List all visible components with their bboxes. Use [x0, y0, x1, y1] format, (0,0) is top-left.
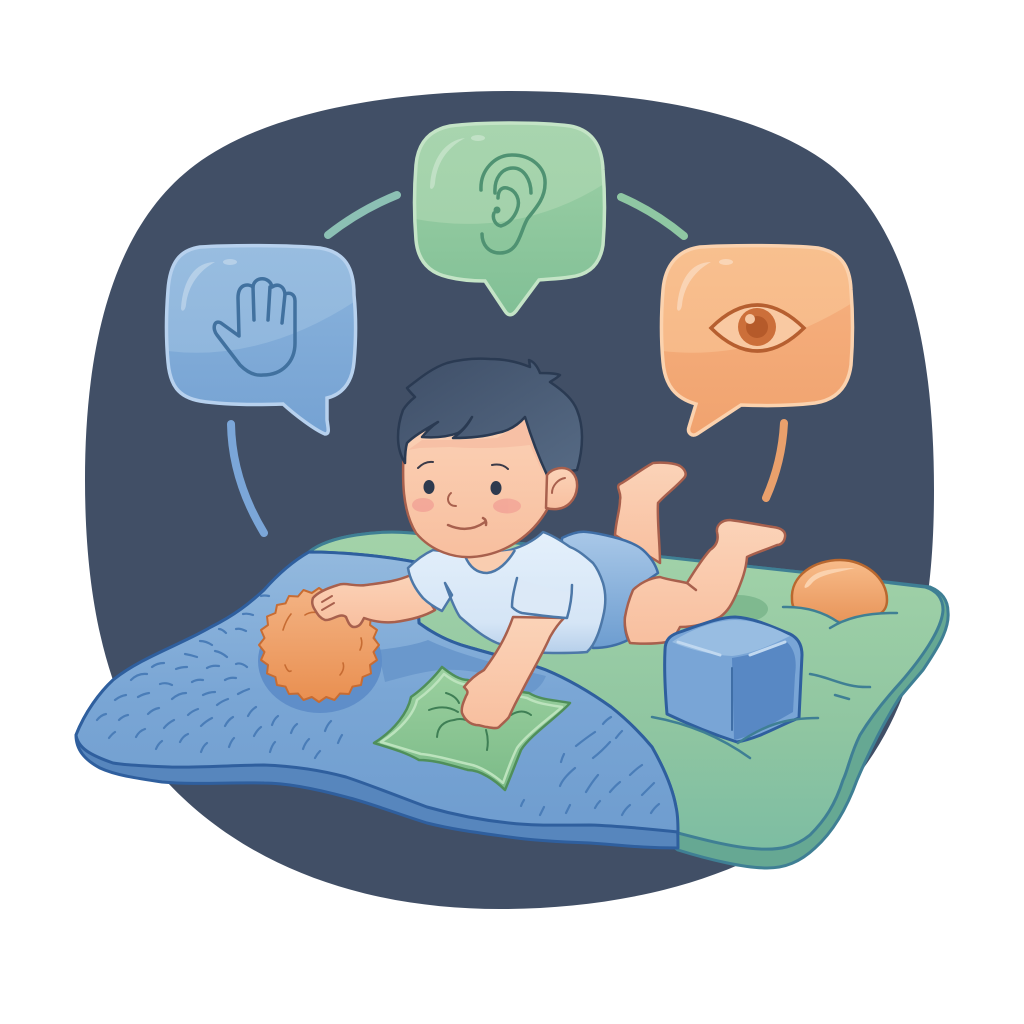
hair	[398, 359, 582, 475]
stitch marks	[97, 596, 659, 815]
dark background blob	[85, 91, 934, 909]
connector arcs	[231, 195, 784, 533]
shadow under baby on blanket	[378, 640, 546, 695]
icon: hand	[214, 279, 295, 375]
icon: eye	[711, 305, 804, 351]
cheeks	[412, 498, 521, 514]
ear	[546, 468, 577, 509]
speech bubble: hearing	[410, 123, 610, 320]
near leg and foot	[625, 520, 785, 644]
wrinkles around cube	[652, 717, 818, 758]
hair shadow on forehead	[408, 420, 545, 478]
far arm and hand on ball	[312, 575, 435, 627]
diaper	[560, 532, 658, 648]
shadow patches on green	[708, 595, 768, 623]
nose	[448, 493, 456, 506]
eyebrows	[418, 462, 508, 469]
orange egg ball	[783, 560, 897, 640]
blanket wrinkles on green	[810, 674, 870, 699]
shirt	[408, 532, 605, 653]
baby	[312, 359, 785, 728]
blue cube	[665, 617, 802, 742]
shirt sleeve	[512, 578, 572, 618]
far leg and foot	[615, 463, 686, 563]
green pillow	[374, 667, 570, 790]
face	[403, 400, 552, 557]
blanket: green quilt section	[309, 532, 948, 868]
icon: ear	[481, 155, 545, 253]
speech bubble: touch	[160, 246, 360, 445]
blanket: blue quilt section	[76, 552, 678, 848]
eyes	[424, 480, 502, 495]
speech bubble: sight	[655, 246, 860, 445]
fuzzy orange ball	[259, 588, 379, 702]
shadow under fuzzy ball	[258, 609, 382, 713]
mouth	[448, 518, 486, 529]
near arm and hand on pillow	[462, 617, 564, 728]
